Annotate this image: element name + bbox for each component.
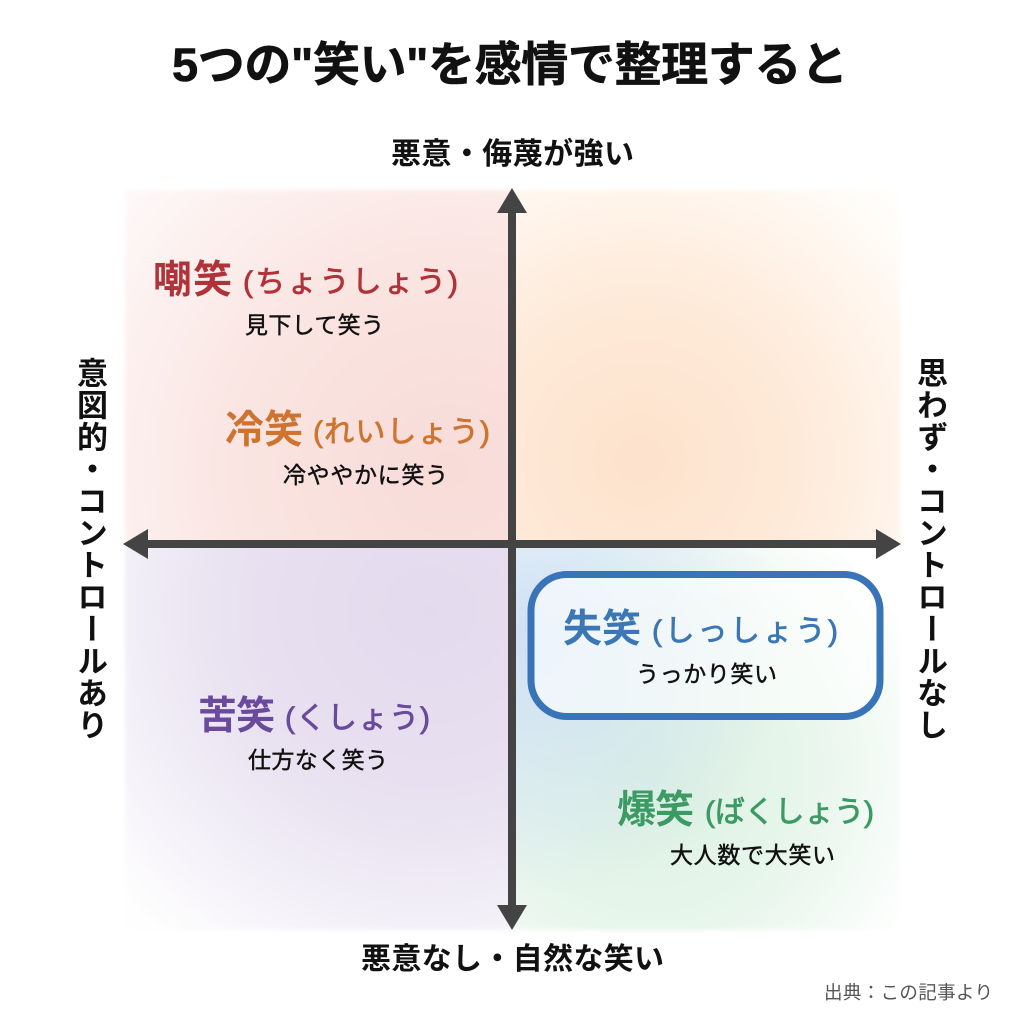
axis label: bottom: 悪意なし・自然な笑い: [361, 943, 664, 976]
panel: lower-right quadrant: [512, 544, 900, 930]
horizontal axis arrow: [123, 529, 901, 559]
axis label: right: 思わず・コントロールなし: [910, 357, 955, 741]
item: 爆笑: 爆笑: [617, 789, 694, 832]
panel: lower-left quadrant: [125, 544, 512, 930]
item: 嘲笑: 嘲笑: [153, 259, 232, 302]
item: 嘲笑: [153, 259, 458, 338]
item: 冷笑: 冷笑: [225, 409, 303, 452]
item: 嘲笑: 見下して笑う: [245, 312, 384, 338]
item: 苦笑: (くしょう): [285, 702, 430, 735]
item: 爆笑: 大人数で大笑い: [670, 842, 835, 868]
source note: 出典：この記事より: [824, 982, 993, 1003]
axis label: top: 悪意・侮蔑が強い: [391, 137, 634, 171]
item: 冷笑: (れいしょう): [313, 416, 490, 449]
item: 冷笑: 冷ややかに笑う: [283, 462, 448, 488]
item: 失笑: うっかり笑い: [636, 661, 777, 687]
item: 嘲笑: (ちょうしょう): [243, 266, 458, 299]
vertical axis arrow: [497, 188, 527, 930]
axis label: left: 意図的・コントロールあり: [70, 357, 115, 741]
callout: highlighted box: [531, 574, 880, 716]
panel: upper-right quadrant: [512, 190, 900, 544]
item: 爆笑: (ばくしょう): [705, 796, 874, 829]
item: 冷笑: [225, 409, 490, 488]
item: 失笑: (しっしょう): [652, 615, 838, 648]
panel: upper-left quadrant: [125, 190, 512, 544]
title: 5つの"笑い"を感情で整理すると: [172, 38, 848, 91]
item: 爆笑: [617, 789, 874, 868]
item: 苦笑: [198, 695, 430, 773]
item: 失笑: [563, 608, 838, 687]
item: 苦笑: 苦笑: [198, 695, 275, 738]
item: 苦笑: 仕方なく笑う: [248, 747, 388, 773]
item: 失笑: 失笑: [563, 608, 641, 651]
